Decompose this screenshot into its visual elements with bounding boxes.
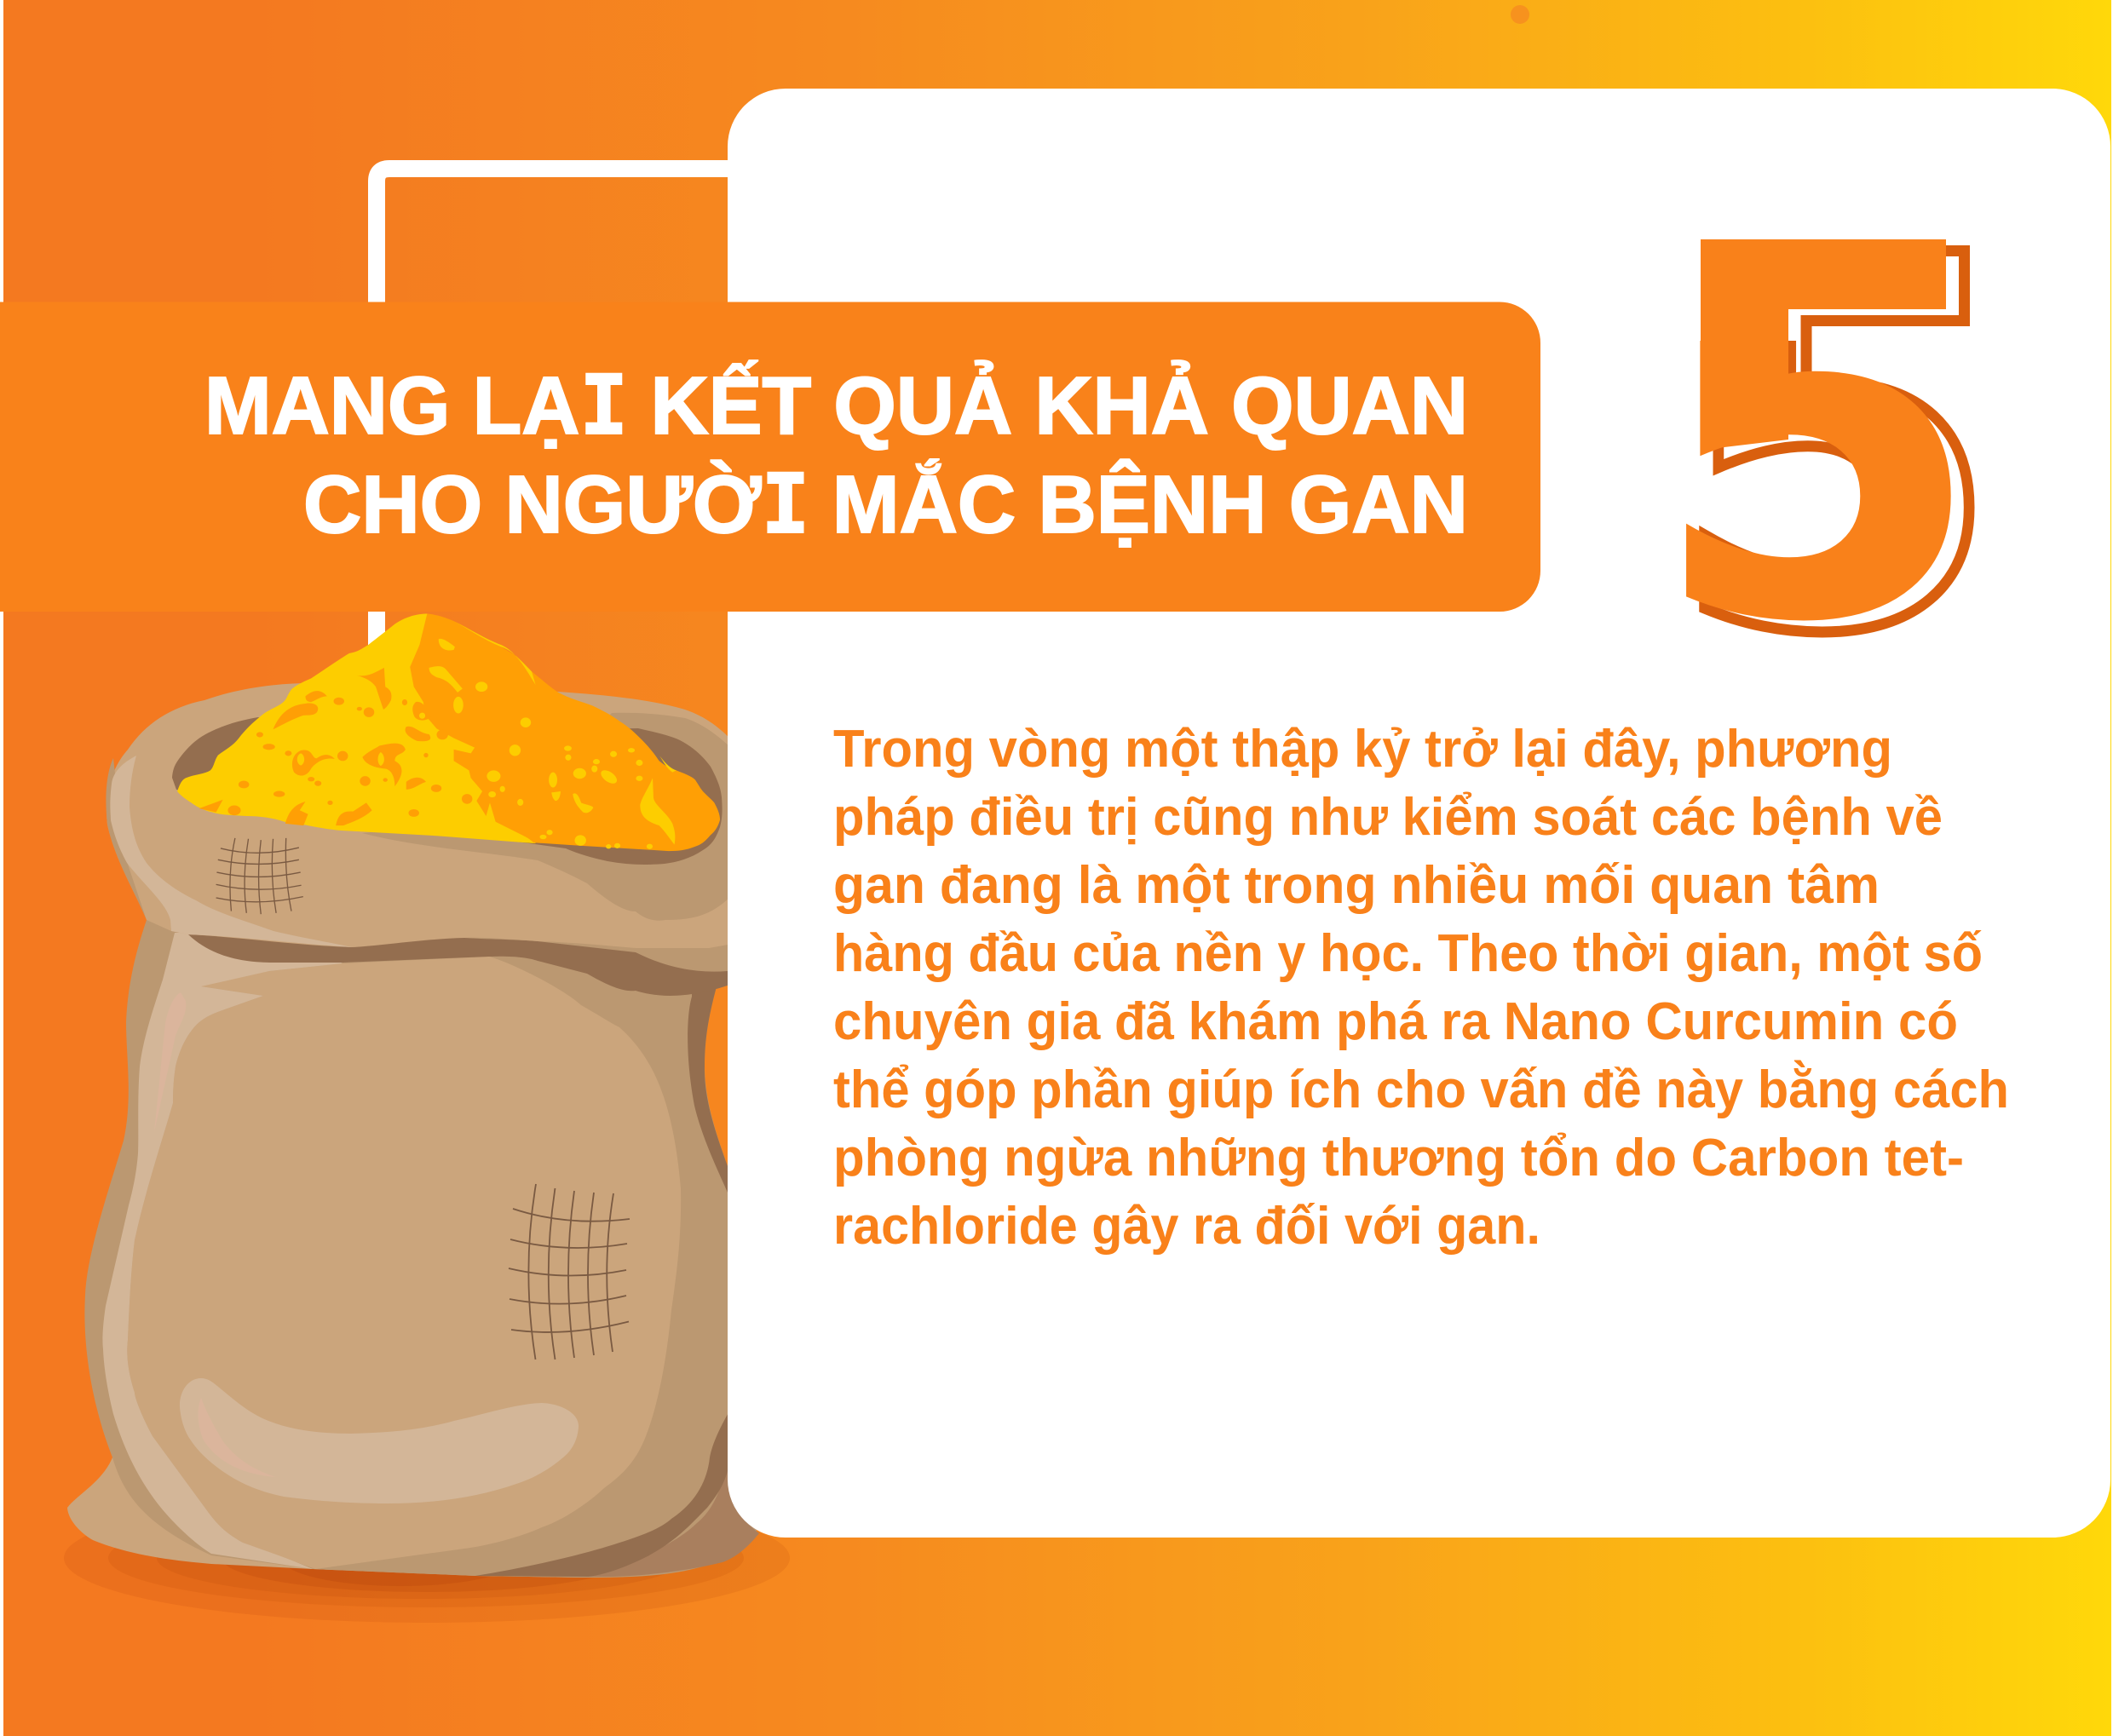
bottom highlight	[180, 1378, 579, 1503]
sack rim	[107, 683, 733, 948]
number 5 top bar and stem	[1701, 239, 1946, 449]
dark right strip	[688, 971, 728, 1193]
title banner	[0, 302, 1540, 612]
highlight pink accent	[198, 1398, 276, 1477]
ground shadow	[64, 1493, 790, 1623]
dark bottom fold	[475, 1405, 733, 1577]
turmeric powder pile	[177, 614, 720, 851]
sack mouth opening	[172, 717, 723, 865]
rim outer shade	[106, 758, 147, 920]
left light strip	[102, 933, 343, 1569]
small burlap patch	[216, 838, 303, 914]
yellow highlights on orange side	[429, 620, 677, 849]
number 5 bowl: 5	[1649, 156, 1984, 731]
sack bottom flap	[67, 1448, 682, 1578]
body paragraph: Trong vòng một thập kỷ trở lại đây, phương	[833, 720, 1892, 779]
large burlap patch	[509, 1184, 630, 1359]
body paragraph: rachloride gây ra đối với gan.	[833, 1197, 1540, 1256]
body paragraph: phòng ngừa những thương tổn do Carbon tet-	[833, 1129, 1964, 1187]
body paragraph: hàng đầu của nền y học. Theo thời gian, một số	[833, 924, 1983, 983]
rim mid shade underlay	[352, 886, 728, 972]
small dot at top	[1511, 5, 1529, 24]
rim left highlight	[110, 756, 352, 947]
white connector line	[377, 169, 741, 681]
pink streak	[154, 992, 186, 1132]
rim right shade	[362, 713, 733, 921]
body paragraph: gan đang là một trong nhiều mối quan tâm	[833, 856, 1880, 915]
darkest bottom right fold	[589, 1453, 759, 1577]
panel: white content card	[728, 89, 2110, 1538]
main body panel	[127, 957, 681, 1569]
pile yellow base	[177, 614, 536, 843]
sack body silhouette	[84, 852, 767, 1578]
title line 2: CHO NGƯỜI MẮC BỆNH GAN	[303, 457, 1468, 552]
pile orange shaded side	[410, 614, 720, 851]
illustration: sack of turmeric powder	[64, 614, 790, 1623]
number 5 outline: bowl: 5	[1667, 167, 2003, 742]
body paragraph: pháp điều trị cũng như kiểm soát các bệnh về	[833, 788, 1943, 847]
body paragraph	[833, 720, 2009, 1256]
body paragraph: thể góp phần giúp ích cho vấn đề này bằng cách	[833, 1061, 2009, 1119]
rim shade band	[188, 933, 733, 996]
body paragraph: chuyên gia đã khám phá ra Nano Curcumin có	[833, 992, 1958, 1051]
orange specks on yellow side	[199, 668, 472, 825]
title line 1: MANG LẠI KẾT QUẢ KHẢ QUAN	[204, 358, 1468, 453]
number 5 outline: top bar	[1789, 250, 1965, 383]
